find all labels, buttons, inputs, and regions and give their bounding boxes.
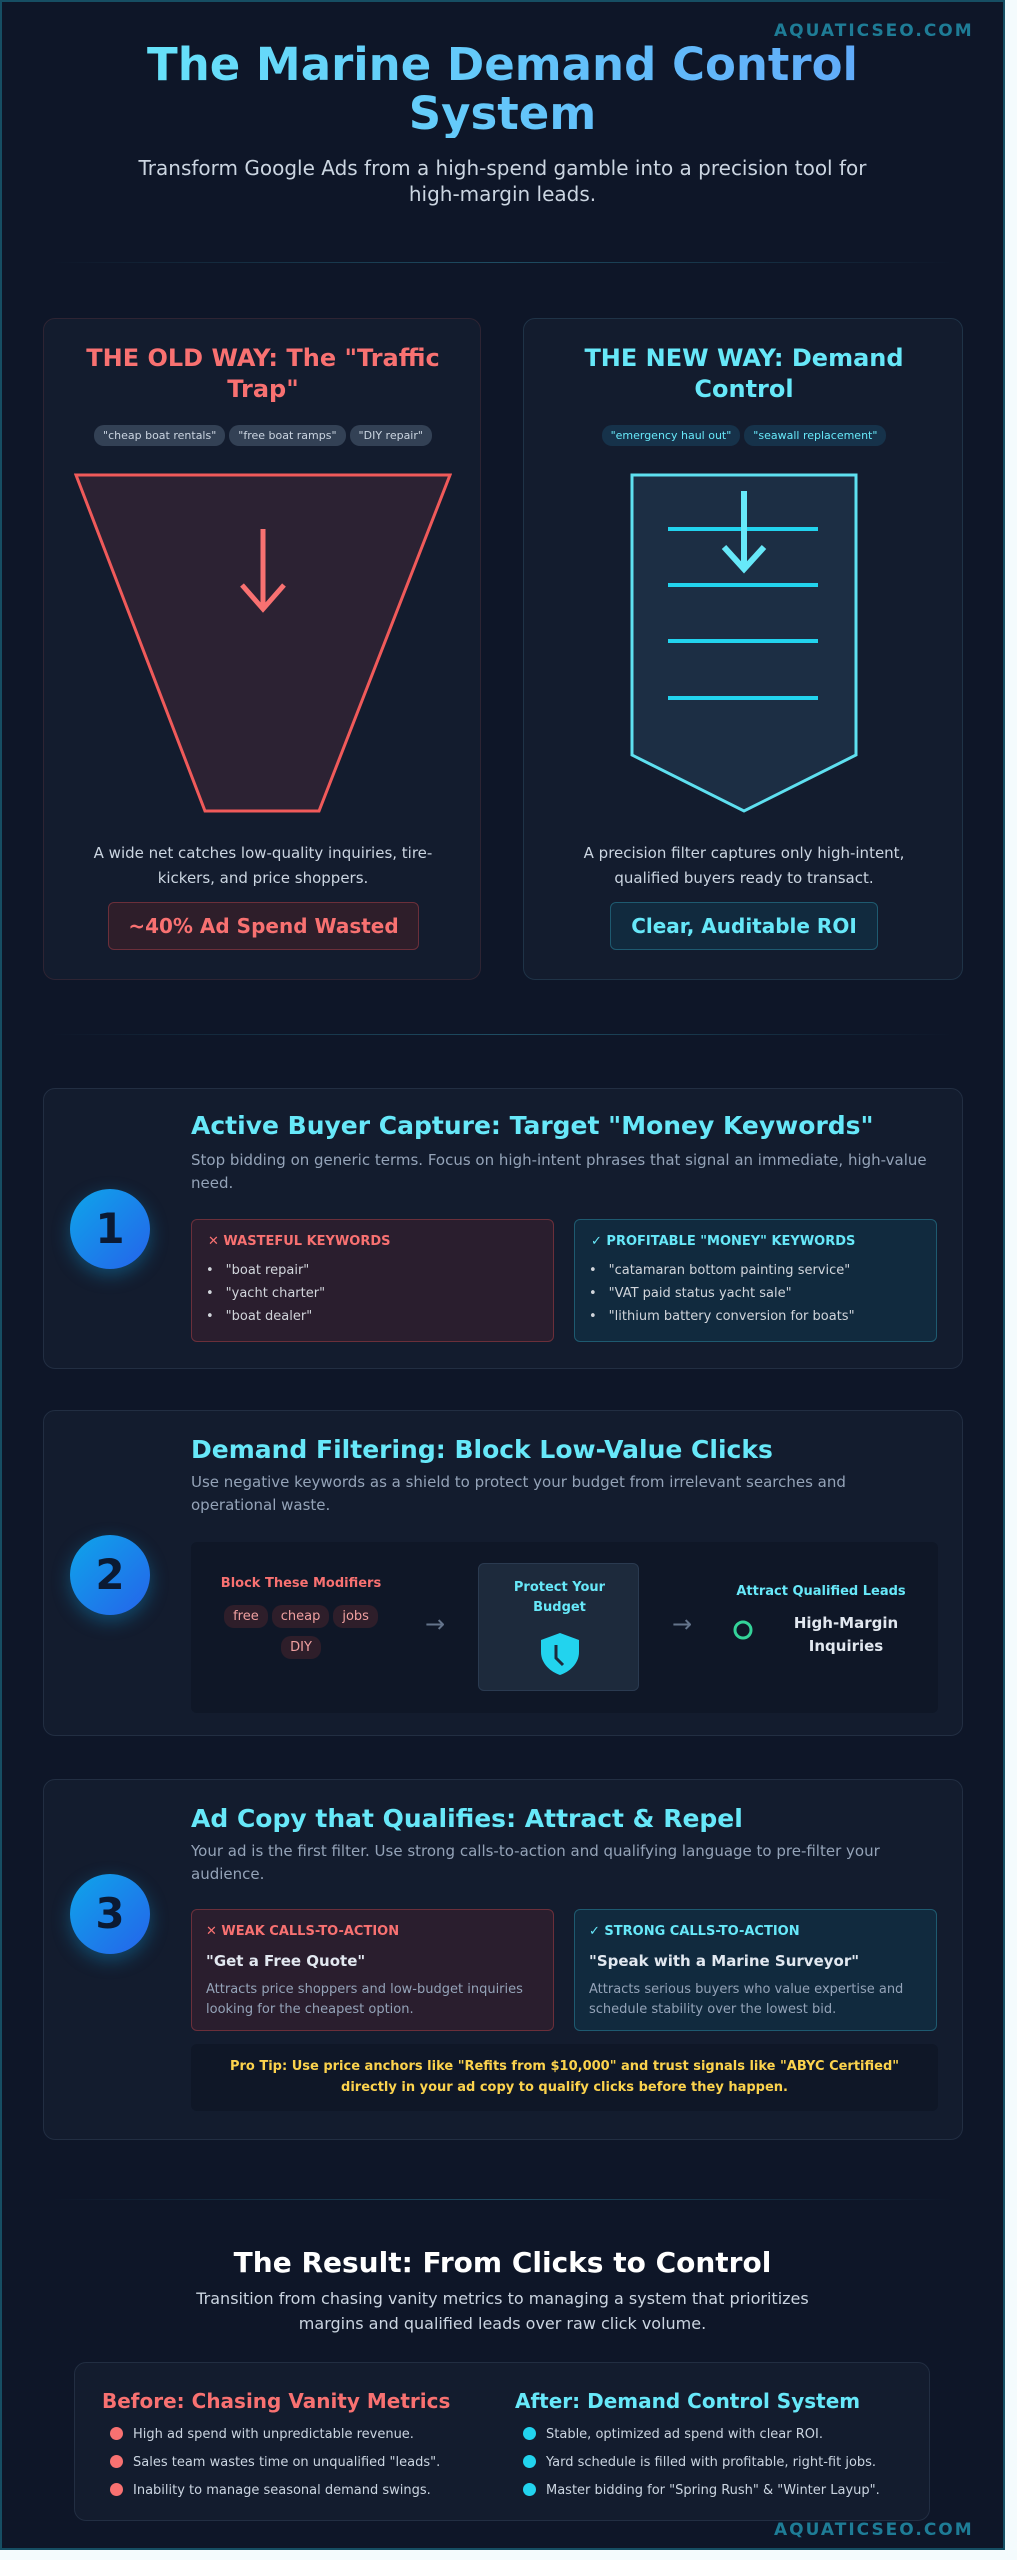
number 2 (70, 1535, 150, 1615)
before column: Before: Chasing Vanity Metrics (102, 2389, 450, 2413)
old way tags: "DIY repair" (359, 429, 423, 442)
box: strong CTA: "Speak with a Marine Surveyor" (589, 1952, 859, 1970)
panel: new way (523, 318, 963, 980)
qualified leads (734, 1584, 906, 1655)
box: weak CTA: "Get a Free Quote" (206, 1952, 365, 1970)
arrow 1: → (425, 1610, 445, 1638)
before column: Sales team wastes time on unqualified "leads". (133, 2455, 440, 2470)
old way heading: THE OLD WAY: The "Traffic Trap" (86, 344, 440, 403)
box: weak CTA: Attracts price shoppers and low-budget inquiries looking for the cheapest option. (206, 1982, 523, 2017)
title: System (409, 87, 596, 140)
box: wasteful keywords: ✕ WASTEFUL KEYWORDS (208, 1234, 391, 1249)
step 2 heading: Demand Filtering: Block Low-Value Clicks (191, 1435, 773, 1464)
before column: Inability to manage seasonal demand swings. (133, 2483, 431, 2498)
after column: Stable, optimized ad spend with clear ROI. (546, 2427, 823, 2442)
pro tip (191, 2044, 938, 2111)
icon: shield (541, 1633, 579, 1675)
block modifiers (221, 1576, 381, 1659)
step 3 heading: Ad Copy that Qualifies: Attract & Repel (191, 1804, 743, 1833)
flow diagram: High-Margin (794, 1614, 898, 1632)
new way heading: THE NEW WAY: Demand Control (584, 344, 904, 403)
step 1 heading: Active Buyer Capture: Target "Money Keywords" (191, 1111, 874, 1140)
new way tags (602, 425, 886, 446)
old way tags (94, 425, 432, 446)
box: strong CTA: ✓ STRONG CALLS-TO-ACTION (589, 1924, 800, 1939)
flow diagram: Inquiries (809, 1637, 883, 1655)
protect budget box: Budget (533, 1600, 586, 1615)
after column: Yard schedule is filled with profitable, right-fit jobs. (546, 2455, 876, 2470)
protect budget box (478, 1563, 639, 1691)
step 2 description: Use negative keywords as a shield to protect your budget from irrelevant searches and operational waste. (191, 1473, 846, 1514)
result heading: The Result: From Clicks to Control (234, 2246, 771, 2279)
box: wasteful keywords (191, 1219, 554, 1342)
number 2: 2 (95, 1550, 125, 1599)
old way tags: "free boat ramps" (238, 429, 337, 442)
icon: funnel (74, 474, 452, 812)
number 1: 1 (95, 1204, 125, 1253)
result description: Transition from chasing vanity metrics to managing a system that prioritizes margins and qualified leads over raw click volume. (196, 2289, 809, 2333)
panel: step 3 (43, 1779, 963, 2140)
number 3: 3 (95, 1889, 125, 1938)
box: money keywords: "VAT paid status yacht sale" (609, 1286, 792, 1301)
panel: step 1 (43, 1088, 963, 1369)
number 3 (70, 1874, 150, 1954)
box: money keywords: ✓ PROFITABLE "MONEY" KEYWORDS (591, 1234, 855, 1249)
qualified leads: Attract Qualified Leads (736, 1584, 906, 1599)
pro tip: directly in your ad copy to qualify clicks before they happen. (341, 2080, 788, 2095)
flow diagram (191, 1542, 938, 1713)
new way tags: "emergency haul out" (611, 429, 731, 442)
box: money keywords (574, 1219, 937, 1342)
after column (515, 2389, 880, 2498)
new way tags: "seawall replacement" (753, 429, 877, 442)
block modifiers: free (233, 1609, 259, 1624)
box: weak CTA (191, 1909, 554, 2031)
before column (102, 2389, 450, 2498)
before column: High ad spend with unpredictable revenue. (133, 2427, 414, 2442)
box: strong CTA (574, 1909, 937, 2031)
box: wasteful keywords: "boat dealer" (226, 1309, 312, 1324)
box: weak CTA: ✕ WEAK CALLS-TO-ACTION (206, 1924, 399, 1939)
box: strong CTA: Attracts serious buyers who value expertise and schedule stability over the lowest bid. (589, 1982, 903, 2017)
new way description: A precision filter captures only high-intent, qualified buyers ready to transact. (584, 844, 904, 887)
title: The Marine Demand Control (147, 38, 858, 91)
block modifiers: DIY (290, 1640, 312, 1655)
after column: Master bidding for "Spring Rush" & "Winter Layup". (546, 2483, 880, 2498)
box: wasteful keywords: "boat repair" (226, 1263, 309, 1278)
block modifiers: jobs (342, 1609, 369, 1624)
box: wasteful keywords: "yacht charter" (226, 1286, 325, 1301)
pro tip: Pro Tip: Use price anchors like "Refits from $10,000" and trust signals like "ABYC Certified" (230, 2059, 899, 2074)
block modifiers: cheap (281, 1609, 320, 1624)
box: money keywords: "catamaran bottom painting service" (609, 1263, 850, 1278)
badge: ROI: Clear, Auditable ROI (631, 914, 857, 938)
old way description: A wide net catches low-quality inquiries, tire-kickers, and price shoppers. (94, 844, 432, 887)
box: money keywords: "lithium battery conversion for boats" (609, 1309, 855, 1324)
protect budget box: Protect Your (514, 1580, 605, 1595)
panel: step 2 (43, 1410, 963, 1736)
old way tags: "cheap boat rentals" (103, 429, 216, 442)
subtitle: Transform Google Ads from a high-spend gamble into a precision tool for high-margin leads. (139, 156, 866, 206)
block modifiers: Block These Modifiers (221, 1576, 381, 1591)
comparison panel (74, 2362, 930, 2521)
icon: shield filter (630, 474, 858, 813)
step 1 description: Stop bidding on generic terms. Focus on high-intent phrases that signal an immediate, high-value need. (191, 1151, 927, 1192)
badge: wasted (108, 902, 419, 950)
panel: old way (43, 318, 481, 980)
number 1 (70, 1189, 150, 1269)
step 3 description: Your ad is the first filter. Use strong calls-to-action and qualifying language to pre-filter your audience. (191, 1842, 880, 1883)
brand bottom: AQUATICSEO.COM (774, 2520, 974, 2540)
badge: wasted: ~40% Ad Spend Wasted (128, 914, 399, 938)
after column: After: Demand Control System (515, 2389, 860, 2413)
arrow 2: → (672, 1610, 692, 1638)
title (60, 40, 945, 138)
brand top: AQUATICSEO.COM (774, 21, 974, 41)
badge: ROI (610, 902, 878, 950)
